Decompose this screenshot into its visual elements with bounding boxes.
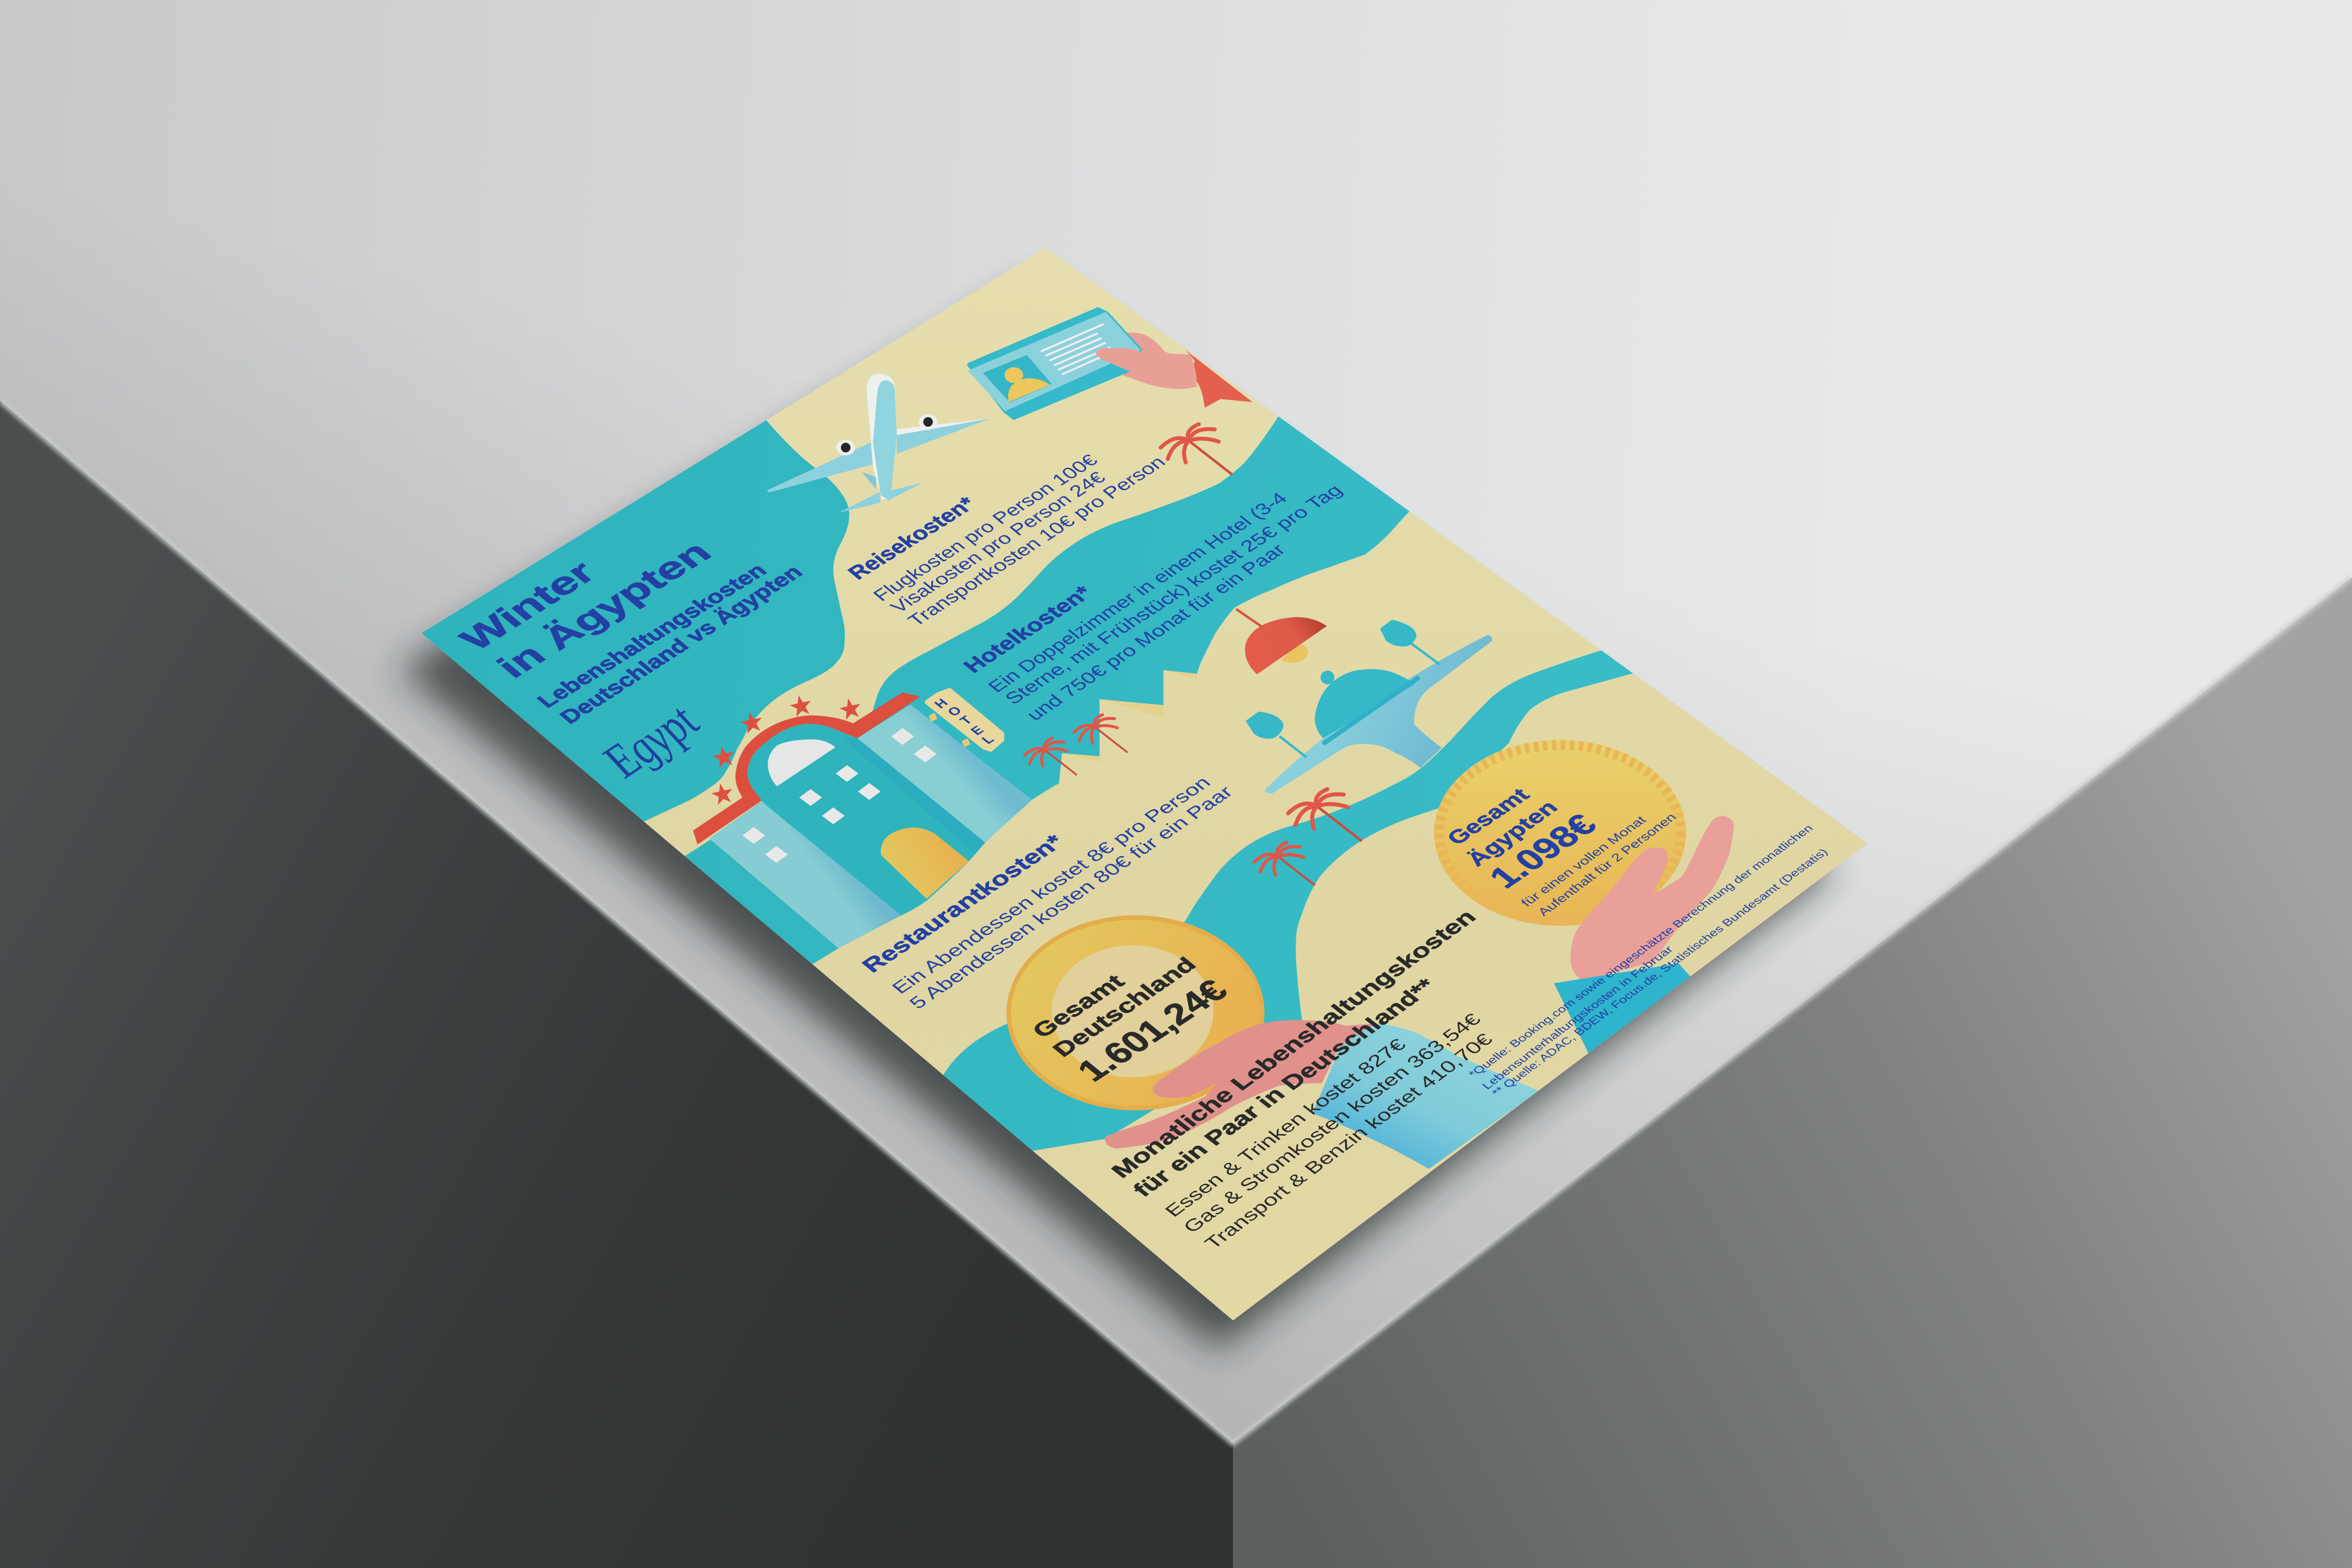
- icon: hand holding card: [968, 309, 1252, 418]
- right wing: [897, 419, 990, 454]
- icon: pale blue sleeve: [1312, 1023, 1539, 1169]
- heading line 1: Monatliche Lebenshaltungskosten: [1106, 906, 1481, 1182]
- windows: [742, 728, 937, 863]
- card person icon: [1005, 367, 1050, 402]
- subtitle line 2: Deutschland vs Ägypten: [555, 561, 808, 728]
- teal region: hotel: [667, 408, 1417, 970]
- heading: Hotelkosten*: [958, 582, 1098, 677]
- hotel sign: [927, 690, 1002, 750]
- heading: Restaurantkosten*: [857, 831, 1069, 977]
- fuselage white: [867, 374, 897, 500]
- amount: 1.601,24€: [1069, 973, 1236, 1088]
- fuselage blue: [873, 381, 897, 501]
- panel: poster: [405, 248, 1867, 1320]
- card pale area: [968, 312, 1141, 411]
- icon: palm 5: [1254, 843, 1315, 885]
- icon: airplane: [767, 374, 990, 513]
- dome window: [768, 739, 836, 786]
- central tower: [747, 724, 985, 915]
- background: block right face: [1233, 578, 2352, 1568]
- note 2: Aufenthalt für 2 Personen: [1535, 811, 1680, 918]
- ID card: [968, 309, 1141, 418]
- icon: palm top: [1161, 424, 1232, 475]
- sign letters: O: [944, 704, 965, 719]
- title line 1: Winter: [452, 555, 604, 657]
- wine glass lower: [1246, 712, 1307, 757]
- text block: Restaurantkosten: [857, 773, 1238, 1012]
- left wing: [709, 801, 901, 948]
- thumb: [1096, 348, 1149, 375]
- line 3: und 750€ pro Monat für ein Paar: [1022, 540, 1290, 724]
- line 2: Visakosten pro Person 24€: [886, 468, 1110, 616]
- text block: Monatliche Lebenshaltungskosten: [1106, 906, 1497, 1252]
- note 1: für einen vollen Monat: [1518, 814, 1650, 909]
- icon: hand with serving tray: [1246, 620, 1493, 793]
- cloche dome: [1315, 669, 1414, 738]
- red roof: [693, 693, 920, 845]
- card body: [969, 309, 1140, 418]
- teal triangle bottom right: [1554, 963, 1692, 1053]
- sign letters: H: [931, 697, 951, 711]
- line 1: Ein Abendessen kostet 8€ pro Person: [887, 773, 1215, 997]
- sleeve: [1186, 350, 1252, 408]
- icon: hotel building: [693, 690, 1032, 948]
- source line 1: *Quelle: Booking.com sowie eingeschätzte Berechnung der monatlichen: [1466, 823, 1816, 1079]
- hotel stars: [710, 693, 863, 805]
- heading: Reisekosten*: [843, 492, 981, 583]
- tail stabilisers: [838, 492, 881, 513]
- right wing: [857, 705, 1032, 843]
- coin: Gesamt Deutschland: [1007, 915, 1264, 1110]
- line 2: Sterne, mit Frühstück) kostet 25€ pro Tag: [1000, 481, 1347, 708]
- poster artwork: [405, 309, 1734, 1169]
- label 1: Gesamt: [1027, 971, 1130, 1042]
- sign letters: L: [979, 733, 997, 746]
- icon: palm 2: [1024, 738, 1077, 775]
- lamp bulb: [1281, 643, 1308, 663]
- card text lines: [1042, 325, 1110, 374]
- line 1: Flugkosten pro Person 100€: [869, 451, 1102, 605]
- subtitle line 1: Lebenshaltungskosten: [532, 559, 771, 712]
- teal region: title: [405, 405, 849, 828]
- sign letters: [931, 697, 997, 746]
- right engine: [919, 414, 937, 430]
- line 3: Transport & Benzin kostet 410,70€: [1200, 1030, 1497, 1252]
- sign letters: T: [957, 713, 975, 727]
- label 2: Deutschland: [1047, 953, 1202, 1061]
- amount: 1.098€: [1481, 808, 1605, 894]
- text block: Reisekosten: [843, 451, 1170, 630]
- source line 2: Lebensunterhaltungskosten in Februar: [1479, 944, 1676, 1091]
- line 1: Essen & Trinken kostet 827€: [1160, 1035, 1410, 1220]
- line 2: 5 Abendessen kosten 80€ für ein Paar: [905, 782, 1238, 1012]
- text block: sources: [1466, 823, 1830, 1098]
- cloche base: [1324, 678, 1417, 743]
- poster shadow: [399, 285, 1833, 1351]
- lamp cord: [1236, 609, 1262, 627]
- background: block left face: [0, 401, 1233, 1568]
- block edge highlight: [0, 401, 2352, 1444]
- sign letters: E: [968, 724, 987, 737]
- cloche knob: [1321, 671, 1334, 684]
- logo: Egypt signature: Egypt: [589, 696, 712, 787]
- source line 3: ** Quelle: ADAC, BDEW, Focus.de, Statistisches Bundesamt (Destatis): [1489, 846, 1830, 1098]
- icon: pink hand under Deutschland coin: [1105, 1020, 1378, 1148]
- left engine: [836, 440, 855, 455]
- door: [881, 827, 969, 899]
- wine glass upper: [1380, 620, 1440, 665]
- tray and arm: [1265, 636, 1493, 793]
- line 2: Gas & Stromkosten kosten 363,54€: [1179, 1010, 1485, 1237]
- text block: subtitle: [532, 559, 808, 728]
- line 3: Transportkosten 10€ pro Person: [904, 453, 1170, 630]
- icon: restaurant lamp: [1236, 609, 1327, 674]
- hand: [1110, 332, 1197, 389]
- text block: Hotelkosten: [958, 481, 1347, 724]
- title line 2: in Ägypten: [489, 535, 720, 685]
- label 1: Gesamt: [1442, 784, 1535, 849]
- poster paper: [421, 248, 1867, 1320]
- text block: Gesamt Ägypten: [1442, 784, 1680, 918]
- heading line 2: für ein Paar in Deutschland**: [1128, 975, 1441, 1201]
- text block: title: [452, 535, 720, 685]
- lamp shade: [1245, 617, 1327, 674]
- coin: Gesamt Ägypten: [1434, 740, 1686, 926]
- line 1: Ein Doppelzimmer in einem Hotel (3-4: [984, 489, 1292, 696]
- label 2: Ägypten: [1461, 797, 1563, 870]
- icon: palm 3: [1074, 715, 1127, 753]
- card photo: [983, 355, 1052, 402]
- icon: pink hand under Ägypten coin: [1571, 816, 1734, 981]
- teal region: river and coin background: [933, 647, 1643, 1152]
- zigzag pyramid shades: [1062, 670, 1197, 762]
- text block: Gesamt Deutschland: [1027, 953, 1236, 1088]
- left wing: [767, 441, 875, 492]
- icon: palm 4: [1288, 789, 1362, 841]
- sign board: [927, 690, 1002, 750]
- sign tabs: [928, 713, 971, 747]
